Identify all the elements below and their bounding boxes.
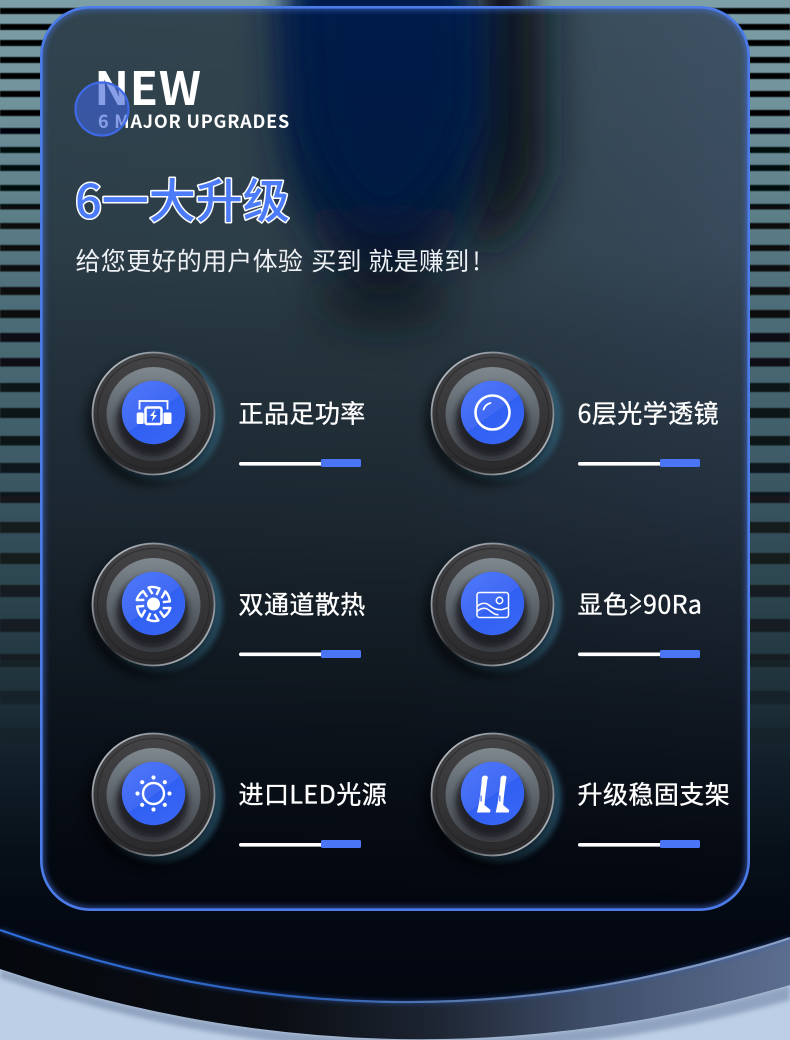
progress bar <box>239 650 361 658</box>
feature: 正品足功率 <box>86 352 366 486</box>
progress bar <box>239 840 361 848</box>
progress bar <box>239 459 361 467</box>
feature: 6层光学透镜 <box>424 352 719 486</box>
label: ≥ <box>628 584 643 621</box>
label: 90Ra <box>643 586 702 622</box>
icon: picture <box>424 544 562 676</box>
label: 进口LED光源 <box>238 776 387 812</box>
label: 6层光学透镜 <box>578 394 719 430</box>
progress bar <box>578 459 700 467</box>
title: 6一大升级 <box>75 163 290 232</box>
label: 显色 <box>578 586 628 622</box>
icon: power button <box>86 352 222 486</box>
feature: 进口LED光源 <box>86 734 387 866</box>
label <box>578 584 702 622</box>
heading: 6 MAJOR UPGRADES: 6 MAJOR UPGRADES <box>98 108 290 134</box>
blue rim line <box>0 930 790 1002</box>
heading: NEW: NEW <box>94 53 202 119</box>
icon: fan <box>86 544 222 676</box>
icon: LED sun <box>86 734 222 866</box>
label: 正品足功率 <box>238 394 366 430</box>
feature: 升级稳固支架 <box>424 734 730 866</box>
decorative blue lens circle <box>76 82 128 136</box>
subtitle: 给您更好的用户体验 买到 就是赚到! <box>76 242 481 278</box>
feature: 显色≥90Ra <box>424 544 702 676</box>
feature: 双通道散热 <box>86 544 366 676</box>
label: 双通道散热 <box>238 586 366 622</box>
progress bar <box>578 840 700 848</box>
panel: glass card <box>40 0 750 911</box>
icon: lens <box>424 352 562 486</box>
icon: stand <box>424 734 562 866</box>
progress bar <box>578 650 700 658</box>
label: 升级稳固支架 <box>578 776 730 812</box>
